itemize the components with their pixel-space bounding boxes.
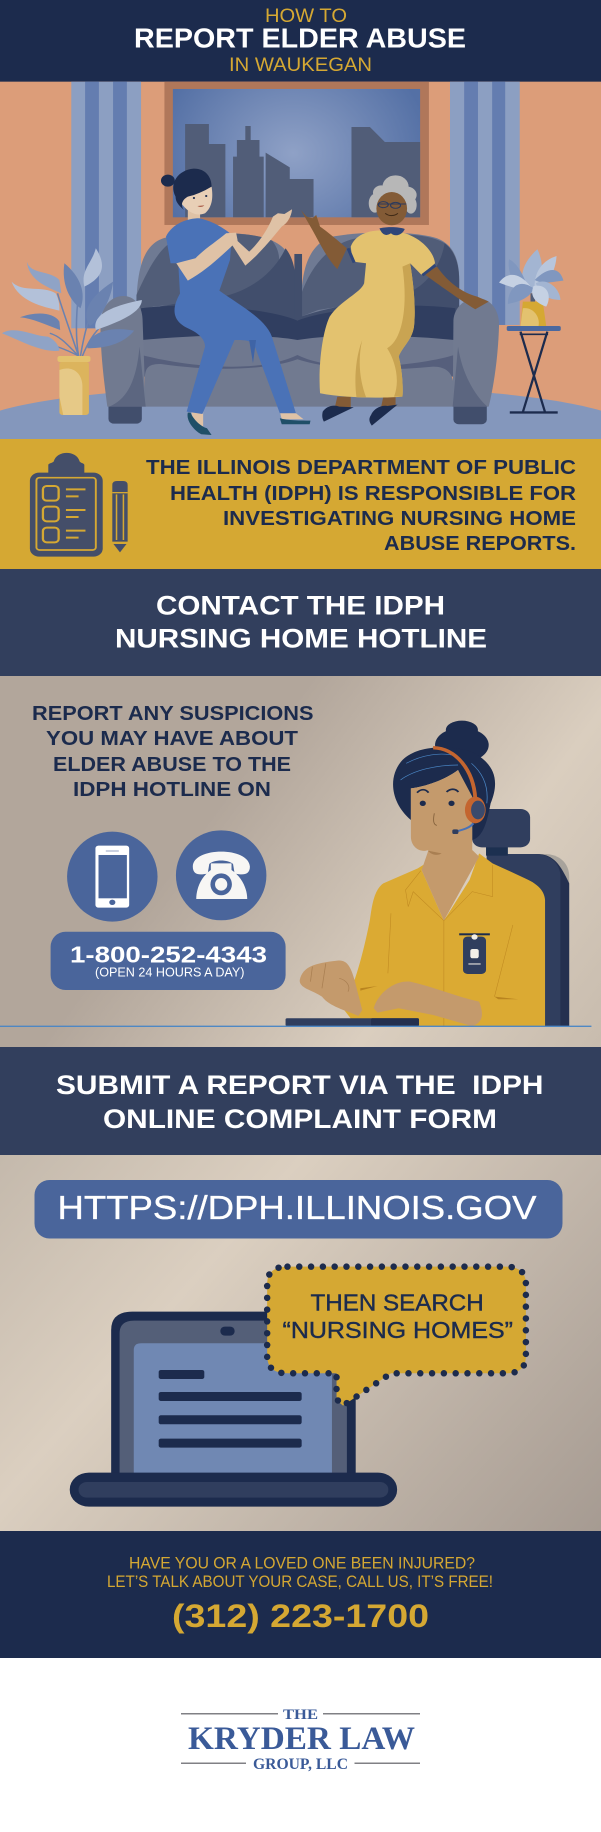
title: in waukegan: IN WAUKEGAN (229, 54, 372, 76)
panel: page header (0, 0, 601, 82)
callout: website address: HTTPS://DPH.ILLINOIS.GOV (58, 1189, 536, 1226)
text: IDPH statement (146, 456, 576, 555)
logo: Kryder Law Group: KRYDER LAW (188, 1721, 415, 1757)
panel: online complaint form (0, 1155, 601, 1531)
callout: hotline number: (OPEN 24 HOURS A DAY) (95, 965, 244, 980)
text: phone number: (312) 223-1700 (172, 1598, 429, 1634)
icon: rotary telephone (176, 830, 266, 920)
text: report suspicions: REPORT ANY SUSPICIONS (32, 702, 314, 725)
icon: clipboard and pencil (30, 453, 128, 557)
callout: website address (34, 1180, 562, 1238)
text: report suspicions (32, 702, 314, 801)
callout: hotline number: 1-800-252-4343 (70, 942, 267, 968)
heading: submit a report: SUBMIT A REPORT VIA THE IDPH (56, 1070, 544, 1100)
heading: contact the IDPH hotline: NURSING HOME HOTLINE (115, 624, 487, 654)
text: IDPH statement: INVESTIGATING NURSING HOME (223, 507, 576, 530)
text: IDPH statement: ABUSE REPORTS. (384, 532, 576, 555)
text: IDPH statement: HEALTH (IDPH) IS RESPONSIBLE FOR (170, 482, 576, 505)
text: invitation: HAVE YOU OR A LOVED ONE BEEN INJURED? (129, 1555, 475, 1573)
text: report suspicions: YOU MAY HAVE ABOUT (46, 727, 298, 750)
heading: contact the IDPH hotline: CONTACT THE IDPH (156, 591, 445, 621)
callout: speech bubble: THEN SEARCH (310, 1290, 484, 1316)
title: report elder abuse: REPORT ELDER ABUSE (134, 23, 466, 54)
curtains (71, 82, 520, 328)
panel: living room illustration (0, 82, 601, 439)
text: report suspicions: IDPH HOTLINE ON (73, 778, 271, 801)
illustration: call center agent with headset (0, 721, 591, 1027)
side table with plant (499, 249, 563, 414)
panel: call to action footer (0, 1531, 601, 1658)
heading: contact the IDPH hotline (0, 569, 601, 676)
callout: speech bubble: “NURSING HOMES” (282, 1317, 513, 1343)
elderly woman figure (301, 175, 489, 426)
text: report suspicions: ELDER ABUSE TO THE (53, 753, 291, 776)
title: how to: HOW TO (265, 5, 347, 27)
left plant (2, 248, 142, 415)
text: IDPH statement: THE ILLINOIS DEPARTMENT OF PUBLIC (146, 456, 576, 479)
text: free case: LET’S TALK ABOUT YOUR CASE, CALL US, IT’S FREE! (107, 1573, 493, 1591)
callout: speech bubble (267, 1267, 526, 1406)
icon: smartphone (67, 832, 158, 922)
panel: hotline (0, 676, 601, 1047)
logo: Kryder Law Group: GROUP, LLC (253, 1756, 348, 1773)
sofa (100, 233, 499, 424)
illustration: laptop (70, 1312, 397, 1507)
callout: hotline number (51, 932, 286, 990)
heading: submit a report: ONLINE COMPLAINT FORM (103, 1104, 497, 1134)
panel: gold IDPH statement band (0, 439, 601, 569)
window with city skyline (164, 82, 429, 225)
logo: Kryder Law Group: THE (283, 1707, 318, 1723)
logo: Kryder Law Group (181, 1707, 420, 1773)
nurse figure (161, 169, 310, 435)
heading: submit a report (0, 1047, 601, 1155)
